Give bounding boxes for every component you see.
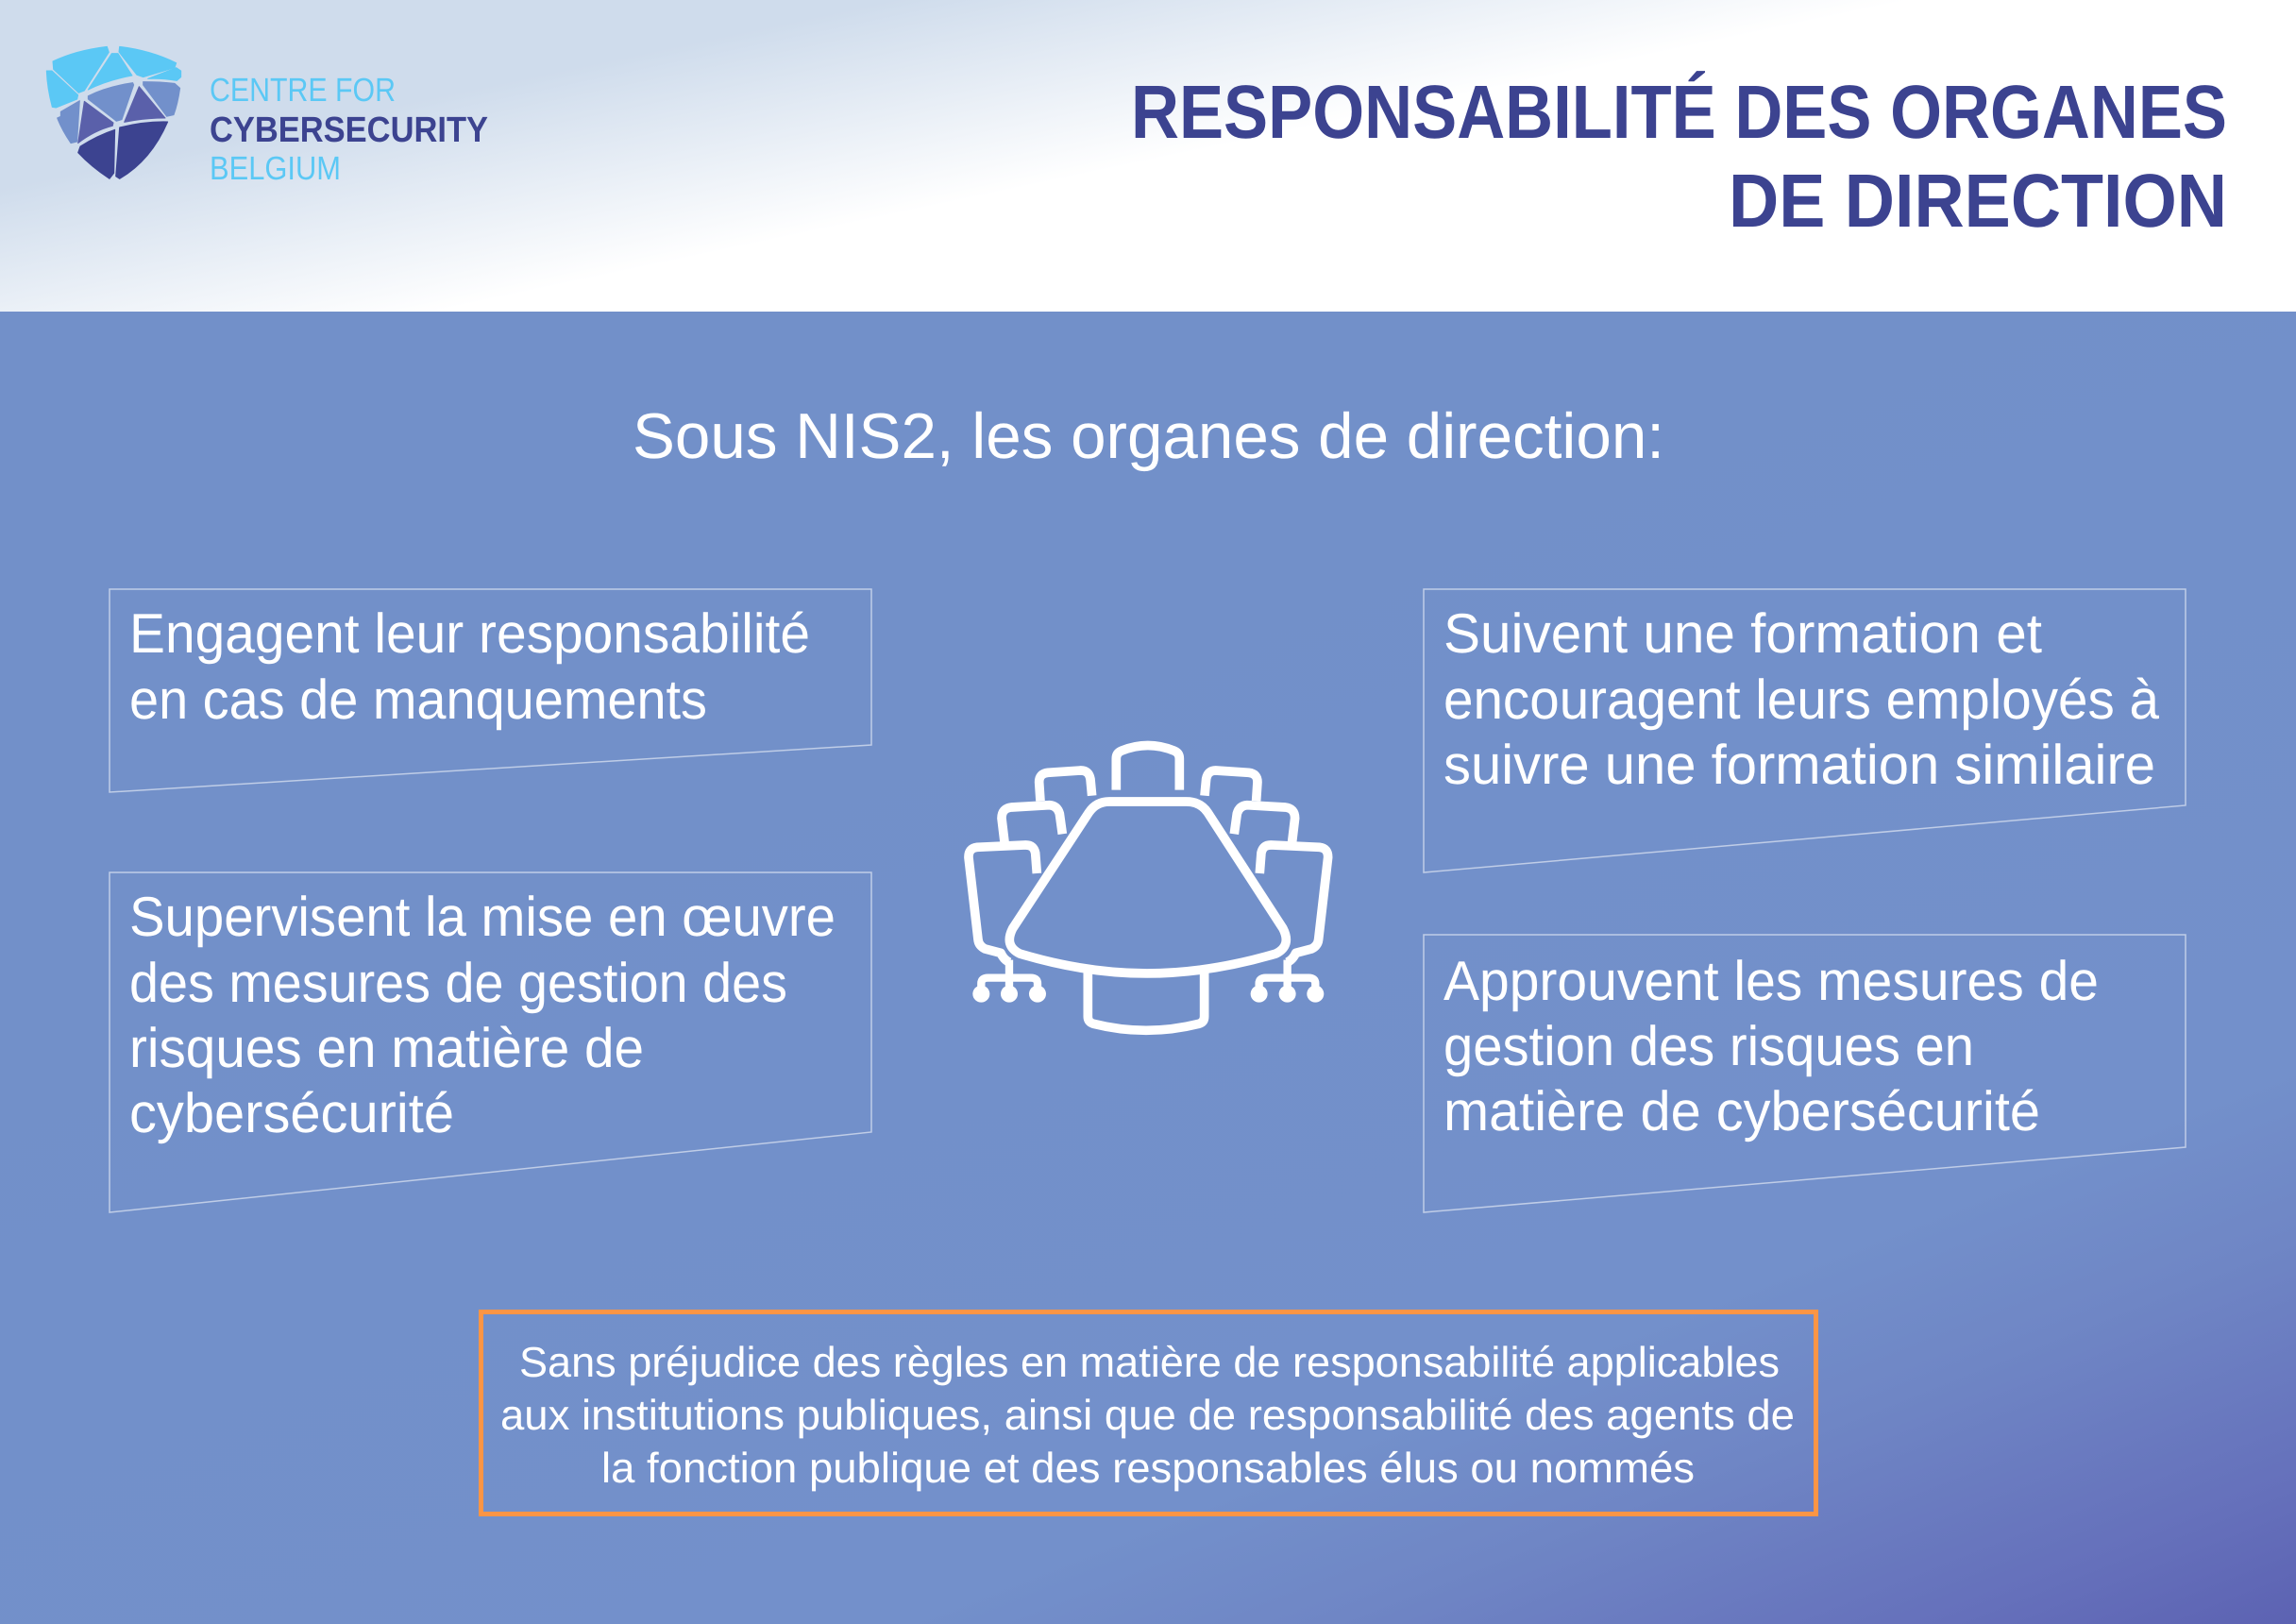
- icon: boardroom table with chairs: [969, 745, 1328, 1030]
- panel: approve measures: Approuvent les mesures de: [1443, 950, 2099, 1012]
- logo text: cybersecurity: CYBERSECURITY: [210, 110, 488, 150]
- panel: training: encouragent leurs employés à: [1443, 668, 2159, 731]
- icon part: table: [1009, 802, 1286, 973]
- panel: responsibility for breaches: Engagent leur responsabilité: [129, 602, 810, 665]
- icon part: head chair: [1116, 745, 1179, 790]
- callout: public institutions note: [481, 1312, 1816, 1514]
- callout: public institutions note: Sans préjudice des règles en matière de responsabilité applicables: [519, 1338, 1780, 1386]
- panel: training: [1424, 589, 2186, 872]
- panel: supervise implementation: risques en matière de: [129, 1017, 644, 1079]
- panel: training: Suivent une formation et: [1443, 602, 2042, 665]
- panel: supervise implementation: [110, 872, 871, 1212]
- logo text: centre for: CENTRE FOR: [210, 72, 396, 109]
- panel: supervise implementation: des mesures de gestion des: [129, 952, 787, 1014]
- panel: responsibility for breaches: [110, 589, 871, 792]
- callout: public institutions note: aux institutions publiques, ainsi que de responsabilité des agents de: [500, 1391, 1795, 1439]
- logo: Centre for Cybersecurity Belgium: [46, 46, 488, 187]
- header background: [0, 0, 2296, 312]
- callout: public institutions note: la fonction publique et des responsables élus ou nommés: [601, 1444, 1695, 1492]
- logo text: belgium: BELGIUM: [210, 150, 341, 187]
- panel: responsibility for breaches: en cas de manquements: [129, 668, 707, 731]
- icon: network shield: [46, 46, 181, 178]
- title: [1131, 70, 2227, 243]
- icon part: left chairs: [969, 770, 1092, 1003]
- panel: supervise implementation: Supervisent la mise en œuvre: [129, 886, 836, 948]
- panel: supervise implementation: cybersécurité: [129, 1082, 454, 1144]
- subheading: Sous NIS2, les organes de direction:: [633, 400, 1664, 472]
- icon part: right chairs: [1205, 770, 1328, 1003]
- panel: approve measures: matière de cybersécurité: [1443, 1080, 2040, 1142]
- panel: approve measures: [1424, 935, 2186, 1212]
- panel: approve measures: gestion des risques en: [1443, 1015, 1974, 1077]
- icon part: foot chair: [1088, 973, 1205, 1030]
- panel: training: suivre une formation similaire: [1443, 734, 2155, 796]
- title: DE DIRECTION: [1729, 159, 2227, 243]
